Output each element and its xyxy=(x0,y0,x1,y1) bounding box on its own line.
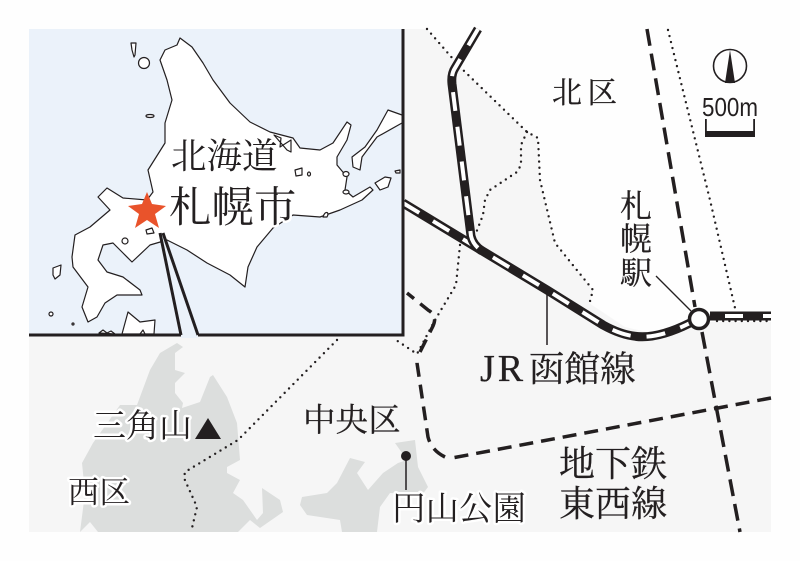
label: Chuo ward: 中央区 xyxy=(303,402,401,439)
Kunashiri island xyxy=(352,110,402,170)
scale bar xyxy=(702,92,758,137)
label: JR Hakodate line: JR xyxy=(480,348,526,390)
label: subway Tozai line xyxy=(559,444,667,524)
subway Tozai line (dashed) xyxy=(407,293,771,458)
Honshu land xyxy=(122,312,155,334)
label: Sapporo station: 幌 xyxy=(620,221,652,257)
green space: Maruyama park area xyxy=(300,440,428,532)
icon: red star xyxy=(128,192,166,228)
label: Sapporo station: 駅 xyxy=(619,255,652,291)
label: Sapporo city: 札幌市 xyxy=(169,185,297,232)
scale label: 500m xyxy=(702,92,758,122)
icon: Sapporo station xyxy=(690,310,708,328)
pointer wedge outline xyxy=(160,233,198,335)
panel: Hokkaido inset xyxy=(29,29,403,338)
label: Sapporo station: 札 xyxy=(620,188,652,224)
leader: JR line xyxy=(546,290,548,345)
small islands xyxy=(49,43,400,334)
scale rule xyxy=(705,119,755,137)
label: Sapporo station xyxy=(619,188,652,291)
Hokkaido land xyxy=(72,38,373,322)
label: JR Hakodate line: 函館線 xyxy=(529,349,636,389)
leader: Sapporo station xyxy=(656,276,691,311)
label: JR Hakodate line xyxy=(480,348,636,390)
icon: mountain triangle xyxy=(195,418,221,439)
label: Maruyama park: 円山公園 xyxy=(392,491,526,528)
label: subway Tozai line: 東西線 xyxy=(559,484,667,524)
label: Sankakuyama: 三角山 xyxy=(93,409,192,445)
marker: Maruyama park xyxy=(401,451,411,490)
label: subway Tozai line: 地下鉄 xyxy=(559,444,667,484)
icon: north compass xyxy=(714,50,746,83)
green space: mountain area xyxy=(80,343,283,532)
label: Kita ward: 北区 xyxy=(552,77,622,110)
pointer wedge xyxy=(161,233,198,338)
inset sea xyxy=(29,29,403,335)
panel: north ward white area xyxy=(427,29,771,335)
subway Namboku line (dashed) xyxy=(647,29,740,532)
ward boundaries (dotted) xyxy=(184,29,771,528)
label: Nishi ward: 西区 xyxy=(68,475,130,510)
inset frame xyxy=(29,29,403,335)
label: Hokkaido: 北海道 xyxy=(171,136,278,176)
JR Hakodate line xyxy=(403,29,771,337)
